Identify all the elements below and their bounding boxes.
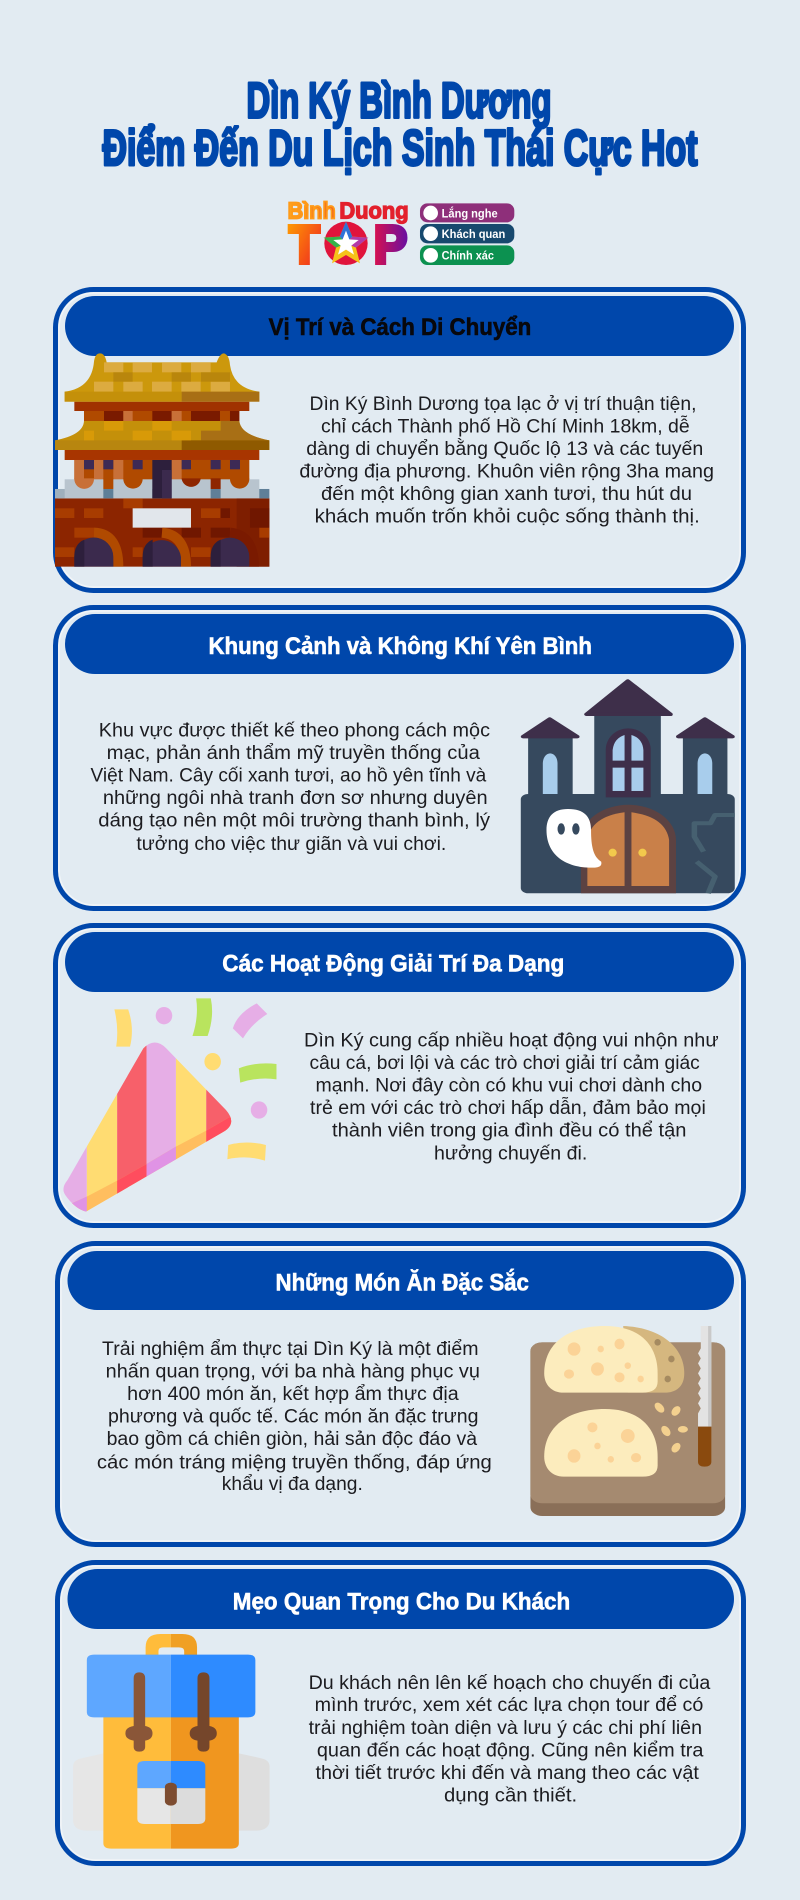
logo: Bình Dương TOP <box>288 198 514 275</box>
text: food: phương và quốc tế. Các món ăn đặc trưng <box>108 1406 478 1427</box>
text: tips: trải nghiệm toàn diện và lưu ý các chi phí liên <box>309 1718 702 1739</box>
pill: Khách quan <box>420 224 514 243</box>
pill: Chính xác: Chính xác <box>442 249 494 263</box>
text: tips: dụng cần thiết. <box>444 1786 577 1807</box>
text: location: Dìn Ký Bình Dương tọa lạc ở vị trí thuận tiện, <box>310 394 696 415</box>
text: scenery: dáng tạo nên một môi trường thanh bình, lý <box>98 811 491 832</box>
pill: Lắng nghe: Lắng nghe <box>442 205 498 220</box>
text: food: nhấn quan trọng, với ba nhà hàng phục vụ <box>106 1361 480 1382</box>
icon: palace <box>55 353 269 567</box>
heading: location <box>65 296 734 356</box>
text: activities: mạnh. Nơi đây còn có khu vui chơi dành cho <box>316 1076 702 1097</box>
text: food: hơn 400 món ăn, kết hợp ẩm thực địa <box>127 1384 459 1405</box>
text: location: chỉ cách Thành phố Hồ Chí Minh 18km, dễ <box>321 415 690 437</box>
text: location: đến một không gian xanh tươi, thu hút du <box>321 484 692 505</box>
text: tips <box>309 1673 711 1807</box>
text: location: đường địa phương. Khuôn viên rộng 3ha mang <box>299 461 714 482</box>
text: activities: Dìn Ký cung cấp nhiều hoạt động vui nhộn như <box>304 1031 719 1052</box>
text: location: khách muốn trốn khỏi cuộc sống thành thị. <box>315 507 700 528</box>
logo wordmark: P <box>374 216 407 275</box>
logo wordmark <box>288 198 409 275</box>
heading: food: Những Món Ăn Đặc Sắc <box>276 1269 529 1297</box>
panel: tips <box>58 1562 744 1864</box>
panel: activities <box>56 926 744 1226</box>
icon: haunted castle <box>521 681 735 893</box>
pill: Khách quan: Khách quan <box>442 227 505 241</box>
text: tips: quan đến các hoạt động. Cũng nên kiểm tra <box>317 1741 704 1762</box>
text: food: các món tráng miệng truyền thống, đáp ứng <box>97 1452 492 1473</box>
text: location: dàng di chuyển bằng Quốc lộ 13 và các tuyến <box>306 438 703 460</box>
text: scenery: những ngôi nhà tranh đơn sơ nhưng duyên <box>103 788 488 809</box>
text: scenery: Khu vực được thiết kế theo phong cách mộc <box>99 721 490 742</box>
text: tips: Du khách nên lên kế hoạch cho chuyến đi của <box>309 1673 711 1694</box>
pill: Chính xác <box>420 245 514 265</box>
text: location <box>299 394 714 528</box>
logo wordmark: Bình <box>288 198 336 224</box>
text: food <box>97 1339 492 1495</box>
text: activities: hưởng chuyến đi. <box>434 1143 587 1164</box>
title <box>102 72 698 176</box>
text: scenery: Việt Nam. Cây cối xanh tươi, ao hồ yên tĩnh và <box>90 766 487 787</box>
panel: location <box>55 290 743 590</box>
text: tips: mình trước, xem xét các lựa chọn tour để có <box>315 1695 703 1716</box>
pill: Lắng nghe <box>420 203 514 222</box>
panel: food <box>58 1244 744 1544</box>
text: activities: câu cá, bơi lội và các trò chơi giải trí cảm giác <box>310 1053 700 1074</box>
icon: bread on cutting board <box>530 1326 725 1516</box>
title: Dìn Ký Bình Dương <box>246 72 552 128</box>
heading: activities <box>65 932 734 992</box>
text: tips: thời tiết trước khi đến và mang theo các vật <box>316 1763 700 1784</box>
text: scenery <box>90 721 491 855</box>
heading: tips <box>68 1569 734 1629</box>
heading: food <box>68 1251 734 1310</box>
logo wordmark: Duong <box>339 198 409 224</box>
heading: scenery: Khung Cảnh và Không Khí Yên Bình <box>208 633 592 660</box>
text: activities: thành viên trong gia đình đều có thể tận <box>332 1121 686 1142</box>
text: activities: trẻ em với các trò chơi hấp dẫn, đảm bảo mọi <box>310 1097 706 1119</box>
icon: backpack <box>73 1634 270 1849</box>
heading: tips: Mẹo Quan Trọng Cho Du Khách <box>233 1588 570 1615</box>
logo star <box>324 222 368 263</box>
heading: scenery <box>65 614 734 674</box>
icon: party popper <box>58 998 276 1217</box>
logo wordmark: T <box>289 216 320 275</box>
text: scenery: mạc, phản ánh thẩm mỹ truyền thống của <box>107 743 480 764</box>
panel: scenery <box>56 608 744 908</box>
text: food: bao gồm cá chiên giòn, hải sản độc đáo và <box>107 1429 478 1450</box>
text: activities <box>304 1031 719 1164</box>
text: scenery: tưởng cho việc thư giãn và vui chơi. <box>136 834 446 855</box>
heading: activities: Các Hoạt Động Giải Trí Đa Dạng <box>222 951 564 978</box>
heading: location: Vị Trí và Cách Di Chuyển <box>269 314 531 341</box>
text: food: Trải nghiệm ẩm thực tại Dìn Ký là một điểm <box>102 1339 478 1360</box>
text: food: khẩu vị đa dạng. <box>222 1474 363 1495</box>
